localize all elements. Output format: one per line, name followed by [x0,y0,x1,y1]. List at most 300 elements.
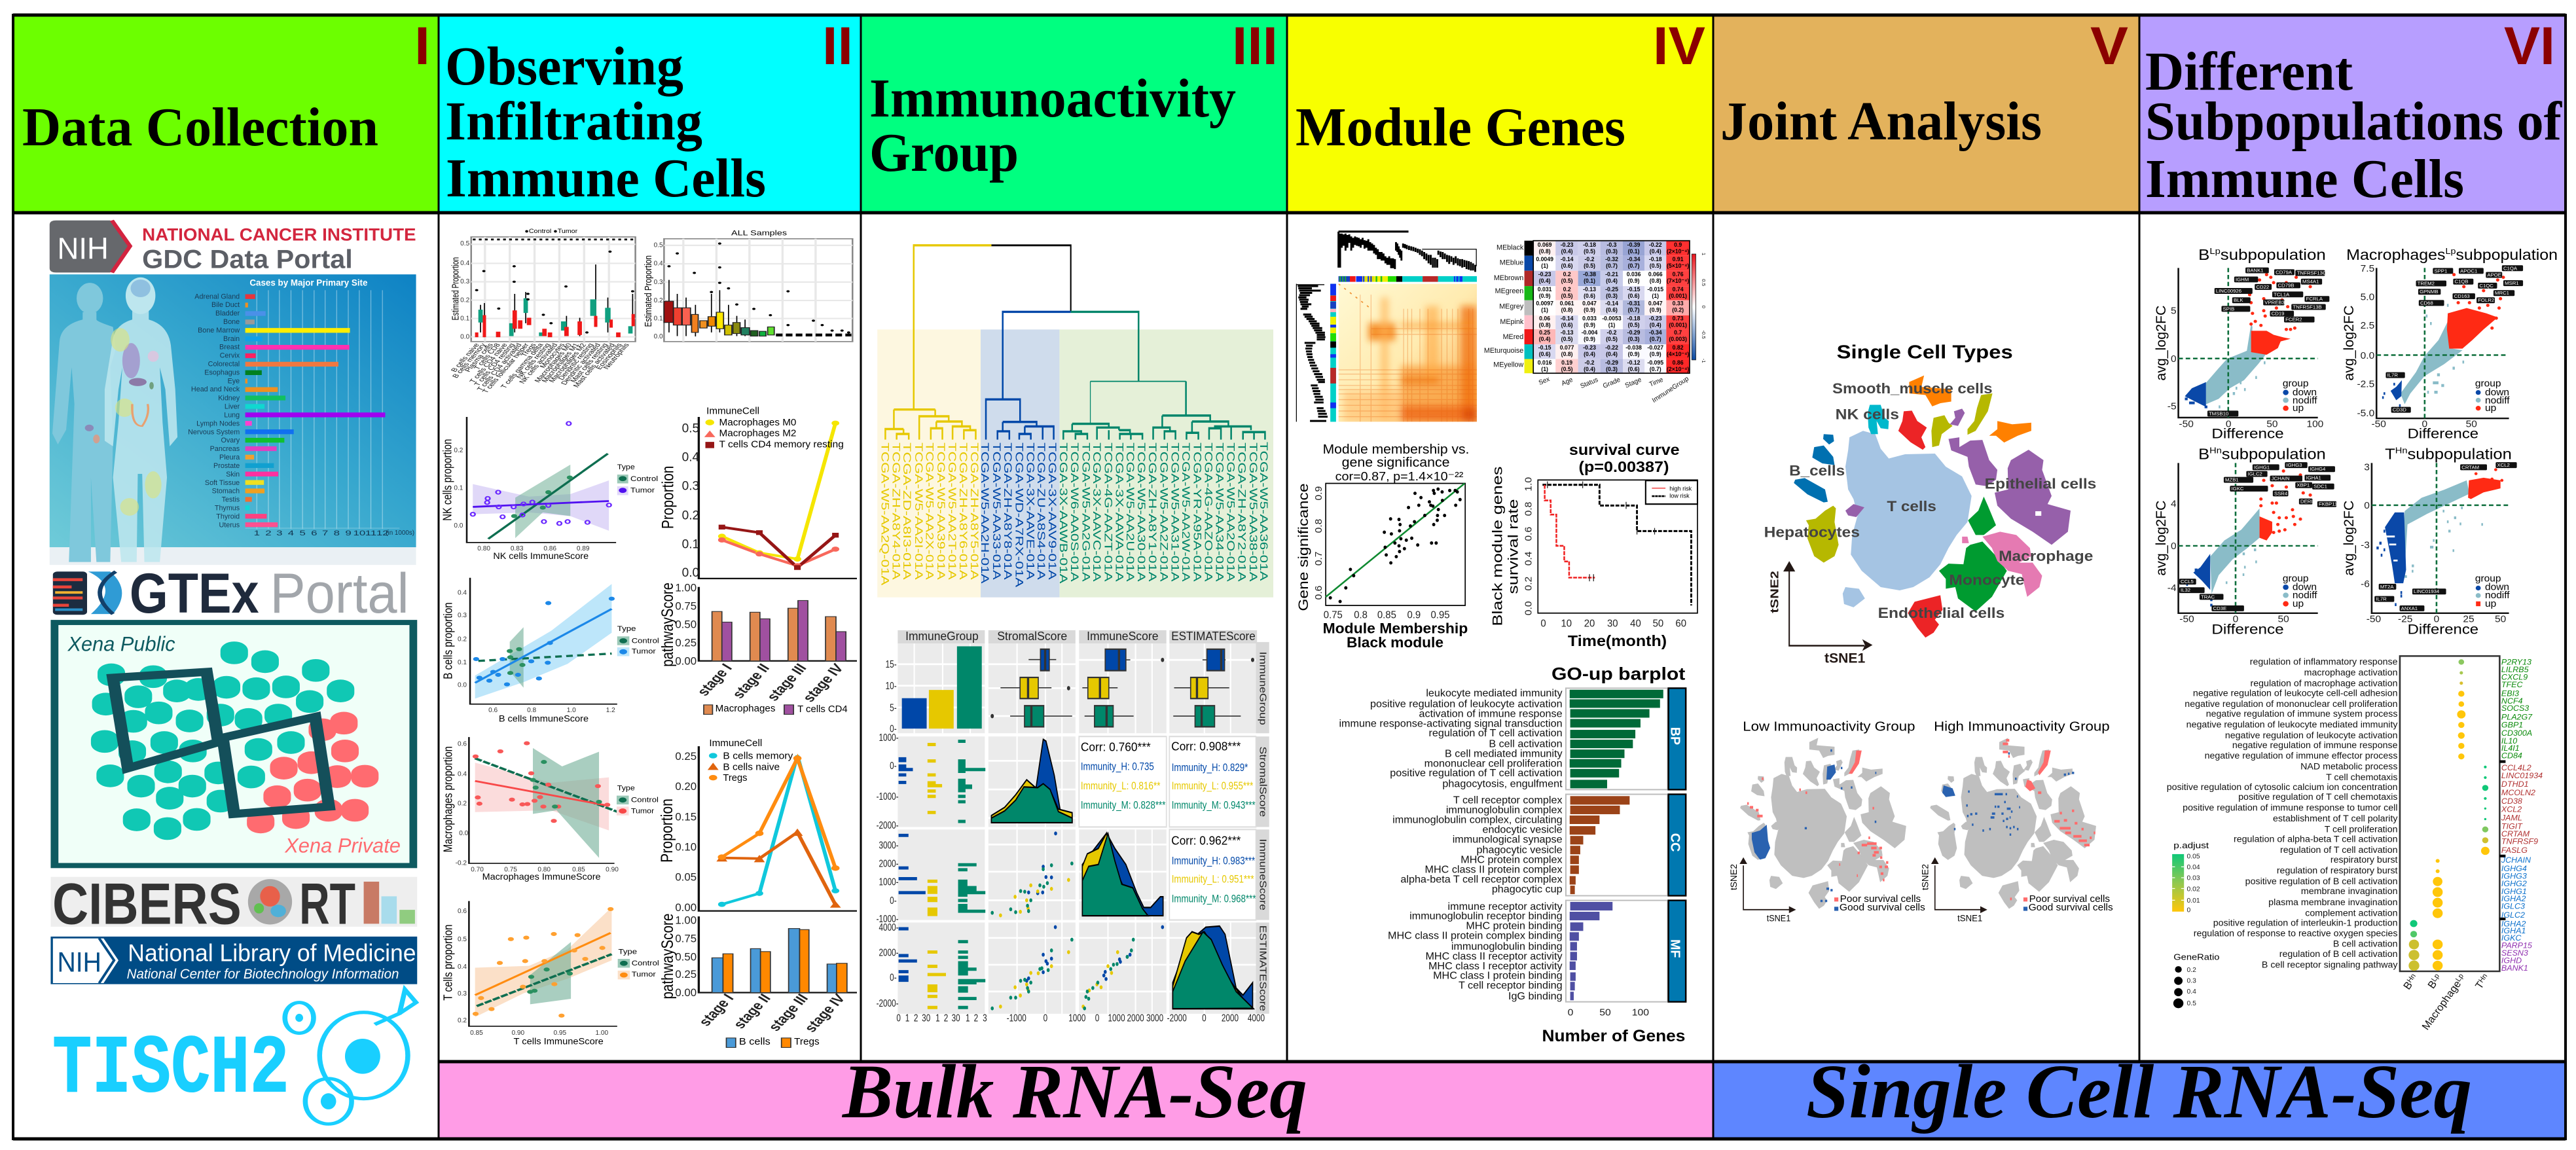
chart: B Hn subpopulation volcano: Hn [2209,446,2222,456]
chart: Cases by Major Primary Site: 2 [265,530,272,537]
chart: GO enrichment dot plot: membrane invagination [2301,886,2398,896]
chart: score correlation matrix: StromalScore [1258,747,1268,817]
chart: boxplot control vs tumor: T cells follicular helper [481,342,531,394]
chart: single cell types tSNE: Single Cell Types [1837,341,2013,363]
chart: GO-up barplot: 50 [1599,1007,1611,1018]
chart: T cells scatter: 0.2 [458,1017,467,1024]
chart: B Lp subpopulation volcano: BLK [2234,297,2243,303]
chart: GO enrichment dot plot: negative regulation of leukocyte activation [2225,730,2398,740]
chart: module-trait correlation heatmap: (0.4) [1584,351,1595,357]
chart: Macrophages Lp subpopulation volcano: C1QB [2454,279,2469,285]
chart: B Hn subpopulation volcano: group [2283,573,2308,584]
chart: Cases by Major Primary Site: Pleura [219,454,240,461]
chart: Macrophages Lp subpopulation volcano: nodiff [2485,395,2510,406]
chart: score correlation matrix: 2000- [879,858,899,869]
chart: pathway score B cells and Tregs: 0.00 [675,986,697,999]
chart: NK cells scatter [441,417,658,561]
chart: sample dendrogram: TCGA-W5-AA2H-01A [979,442,990,584]
chart: module-trait correlation heatmap: -0.18 [1649,256,1662,262]
chart: B cells scatter [442,578,659,724]
chart: GO enrichment dot plot: MCOLN2 [2501,788,2535,797]
chart: module-trait correlation heatmap: (7×10⁻⁴) [1667,278,1689,284]
chart: GO-up barplot: positive regulation of leukocyte activation [1370,699,1563,710]
chart: GO-up barplot: T cell receptor complex [1453,795,1563,806]
chart: T Hn subpopulation volcano: Difference [2408,621,2478,637]
chart: module-trait correlation heatmap: (0.5) [1628,321,1640,329]
chart: module-trait correlation heatmap: (0.5) [1650,262,1661,269]
chart: B cells scatter: B cells ImmuneScore [499,713,589,724]
chart: Cases by Major Primary Site: Bone Marrow [198,327,240,334]
chart: boxplot control vs tumor: NK cells activated [518,342,560,385]
chart: module-trait correlation heatmap: -0.29 [1605,359,1618,366]
chart: module-trait correlation heatmap: 0.033 [1582,315,1597,322]
chart: Macrophages Lp subpopulation volcano: APOC1 [2460,268,2477,274]
chart: boxplot all samples: Estimated Proportion [642,255,654,327]
logo: NIH GDC Data Portal [50,221,416,274]
chart: Cases by Major Primary Site: Brain [223,335,240,343]
chart: Macrophages Lp subpopulation volcano: Macrophages [2346,247,2442,263]
chart: module-trait correlation heatmap: 0.25 [1539,329,1550,336]
chart: B Hn subpopulation volcano: -4 [2168,583,2177,594]
chart: Cases by Major Primary Site: 7 [322,530,328,537]
chart: sample dendrogram: TCGA-W5-AA38-01A [1247,442,1259,582]
chart: score correlation matrix: 1000- [879,732,899,743]
chart: Macrophages Lp subpopulation volcano: 7.5 [2361,263,2374,274]
chart: module-trait correlation heatmap: -0.23 [1561,242,1574,248]
chart: score correlation matrix: Corr: 0.962*** [1171,833,1241,848]
chart: Macrophages Lp subpopulation volcano: subpopulation [2456,247,2558,263]
chart: Cases by Major Primary Site: Thyroid [216,512,240,520]
chart: single cell types tSNE [1764,341,2096,666]
chart: module-trait correlation heatmap: 0.2 [1563,271,1571,278]
chart: boxplot all samples: 0.5 [654,242,663,249]
chart: B Hn subpopulation volcano: IGLC2 [2247,471,2262,477]
chart: sample dendrogram: TCGA-W5-AA34-01A [1213,442,1225,582]
chart: GO enrichment dot plot: 0.01 [2187,897,2200,905]
chart: survival curve: Time(month) [1568,632,1667,649]
chart: T cells scatter: T cells proportion [442,924,455,1001]
chart: B cells scatter: Tumor [632,647,656,656]
chart: Cases by Major Primary Site: (in 1000s) [386,529,414,536]
chart: macrophage/T cell proportion by stage: Macrophages M0 [719,417,796,427]
chart: module membership scatter: Gene significance [1296,484,1311,611]
chart: GO enrichment dot plot: 0.02 [2187,886,2200,893]
chart: module-trait correlation heatmap: -0.31 [1627,300,1640,307]
chart: sample dendrogram: TCGA-W5-AA2I-01A [913,442,924,580]
logo: Xena Public / Private [54,622,413,865]
chart: T Hn subpopulation volcano [2341,446,2517,637]
chart: Macrophages Lp subpopulation volcano: SPP1 [2434,268,2447,274]
chart: survival curve: 1.0 [1523,477,1534,492]
chart: sample dendrogram: TCGA-W5-AA2Z-01A [1157,442,1170,582]
logo: Xena Public / Private: Xena Private [284,835,401,857]
chart: pathway score macrophages and T cells CD4: 1.00 [675,582,697,594]
chart: score correlation matrix: 0- [890,972,897,983]
chart: Cases by Major Primary Site: Testis [222,495,240,504]
chart: T Hn subpopulation volcano: 50 [2495,614,2506,624]
chart: module-trait correlation heatmap: -0.3 [1607,242,1617,248]
chart: score correlation matrix: Immunity_M: 0.943*** [1172,800,1256,812]
chart: sample dendrogram: TCGA-W5-AA31-01A [1169,442,1181,582]
chart: boxplot control vs tumor: Eosinophils [594,342,624,370]
chart: module-trait correlation heatmap: -0.23 [1538,271,1551,278]
chart: NK cells scatter: 0.83 [511,545,524,552]
chart: module-trait correlation heatmap: 0.9 [1674,242,1682,248]
chart: module-trait correlation heatmap: Status [1580,376,1599,390]
chart: GO-up barplot: immunoglobulin complex [1446,805,1563,816]
chart: module-trait correlation heatmap: (2×10⁻⁴) [1667,366,1689,372]
chart: GO-up barplot: immunoglobulin receptor binding [1409,911,1563,922]
chart: pathway score B cells and Tregs: stage III [763,992,812,1033]
chart: B Lp subpopulation volcano: Difference [2211,425,2284,441]
chart: module-trait correlation heatmap: (0.5) [1561,366,1573,372]
logo: CIBERSORT: RT [299,871,355,937]
chart: module-trait correlation heatmap: -0.21 [1605,271,1618,278]
chart: GO enrichment dot plot: IGLC2 [2501,910,2525,920]
chart: module-trait correlation heatmap: (0.001) [1669,293,1687,299]
chart: module-trait correlation heatmap: (0.4) [1539,278,1551,284]
chart: module membership scatter [1296,442,1469,651]
chart: GO enrichment dot plot: T [2473,979,2486,992]
chart: Cases by Major Primary Site: 3 [276,530,283,537]
chart: T cells scatter: Control [632,960,659,967]
chart: GO-up barplot: MHC class II protein complex binding [1388,931,1563,941]
chart: pathway score macrophages and T cells CD4 [658,582,857,714]
chart: module-trait correlation heatmap: MEgreen [1495,287,1523,295]
chart: module-trait correlation heatmap: 0.069 [1538,242,1552,248]
chart: sample dendrogram: TCGA-W5-AA39-01A [935,442,947,580]
chart: module-trait correlation heatmap: -1 [1701,359,1707,363]
chart: B Lp subpopulation volcano: LINC00926 [2216,288,2241,294]
chart: Macrophages Lp subpopulation volcano: -50 [2371,419,2386,429]
chart: single cell types tSNE: tSNE2 [1769,571,1781,613]
panel IV: module genes [1296,232,1707,1045]
chart: survival curve [1489,441,1697,649]
chart: sample dendrogram: TCGA-ZH-A8Y6-01A [957,442,969,580]
chart: T Hn subpopulation volcano: down [2485,582,2509,593]
chart: B cell and Treg proportion by stage: Proportion [658,799,676,863]
header II: Observing Infiltrating Immune Cells [439,15,861,212]
chart: GO-up barplot: phagocytic vesicle [1477,845,1563,856]
chart: boxplot control vs tumor: Neutrophils [602,342,631,370]
chart: GO enrichment dot plot: 0.3 [2187,978,2196,984]
chart: module-trait correlation heatmap: MEyellow [1493,361,1523,369]
chart: score correlation matrix: 30 [952,1013,960,1024]
chart: score correlation matrix: 4000- [879,922,899,933]
chart: B Lp subpopulation volcano: -50 [2179,419,2194,429]
chart: sample dendrogram [877,245,1273,598]
chart: GO enrichment dot plot: CRTAM [2501,829,2530,838]
chart: score correlation matrix: 0- [890,760,897,771]
chart: GO enrichment dot plot: CD38 [2501,797,2522,806]
chart: GO-up barplot: phagocytosis, engulfment [1442,779,1563,789]
header II: Observing Infiltrating Immune Cells: II [822,16,853,76]
chart: Cases by Major Primary Site: Colorectal [208,360,240,368]
chart: B Lp subpopulation volcano: 100 [2306,419,2323,429]
chart: module-trait correlation heatmap: (0.9) [1628,351,1640,357]
chart: sample dendrogram: TCGA-W5-AA2T-01A [946,442,958,580]
chart: score correlation matrix: 0 [1043,1013,1048,1024]
chart: survival curve: 0.4 [1523,551,1534,566]
chart: T Hn subpopulation volcano: -50 [2367,614,2381,624]
chart: score correlation matrix: Immunity_L: 0.951*** [1172,874,1254,886]
chart: module-trait correlation heatmap: (0.2) [1672,306,1684,314]
chart: pathway score B cells and Tregs [658,914,857,1047]
chart: B Hn subpopulation volcano: subpopulation [2222,446,2326,463]
chart: T Hn subpopulation volcano: LINC01934 [2414,588,2439,594]
chart: B Hn subpopulation volcano: FKBP11 [2319,501,2337,507]
logo: National Library of Medicine: National Library of Medicine [128,939,416,966]
chart: B Lp subpopulation volcano: Lp [2209,246,2221,256]
chart: sample dendrogram: TCGA-W5-AA2X-01A [924,442,935,580]
chart: pathway score macrophages and T cells CD4: T cells CD4 [797,704,848,714]
chart: Macrophages Lp subpopulation volcano: 0 [2422,419,2427,429]
header VI: Different Subpopulations of Immune Cells: Immune Cells [2145,149,2464,209]
chart: score correlation matrix: 2000 [1127,1013,1144,1024]
logo: TISCH2: TISCH2 [52,1023,289,1117]
chart: module membership scatter: cor=0.87, p=1.4×10⁻²² [1335,470,1463,483]
chart: pathway score macrophages and T cells CD4: stage I [693,662,736,698]
chart: module membership scatter: 0.8 [1313,519,1324,533]
chart: NK cells scatter: 0.89 [577,545,590,552]
logo: NIH GDC Data Portal: NIH [58,232,109,266]
panel V: joint analysis [1730,341,2113,924]
chart: boxplot control vs tumor: T cells CD8 [473,342,502,371]
chart: score correlation matrix: 0 [896,1013,901,1024]
chart: Macrophages scatter: -0.2 [456,859,467,867]
chart: GO enrichment dot plot: negative regulation of immune response [2232,740,2398,750]
chart: module membership scatter: 0.6 [1313,586,1324,600]
chart: module-trait correlation heatmap: -0.18 [1583,242,1596,248]
chart: T Hn subpopulation volcano: -25 [2398,614,2412,624]
chart: T Hn subpopulation volcano: 3 [2364,462,2370,473]
chart: GO-up barplot: MHC protein complex [1460,855,1563,866]
chart: pathway score macrophages and T cells CD4: stage II [727,662,774,700]
chart: module membership scatter: 0.85 [1377,609,1396,621]
chart: GO enrichment dot plot: CXCL9 [2501,673,2528,681]
chart: B Hn subpopulation volcano: IGHA1 [2306,475,2321,480]
chart: module membership scatter: 0.75 [1324,609,1343,621]
chart: Macrophages Lp subpopulation volcano: 2.5 [2361,320,2374,331]
chart: score correlation matrix: 5- [890,702,897,713]
chart: score correlation matrix: ImmuneScore [1258,839,1268,910]
chart: B Hn subpopulation volcano: IL32 [2181,587,2190,593]
chart: B cell and Treg proportion by stage: 0.15 [675,811,697,823]
chart: GO-up barplot [1339,664,1686,1045]
chart: module-trait correlation heatmap: Sex [1538,376,1551,387]
chart: GO enrichment dot plot: IGKC [2501,933,2522,943]
chart: score correlation matrix: Immunity_M: 0.968*** [1172,893,1256,905]
chart: NK cells scatter: 0.86 [543,545,556,552]
chart: score correlation matrix: Immunity_M: 0.828*** [1081,800,1166,812]
chart: Cases by Major Primary Site: Cervix [220,351,240,360]
chart: score correlation matrix: -1000- [877,913,899,924]
chart: Cases by Major Primary Site: 1 [254,530,260,537]
chart: pathway score macrophages and T cells CD4: 0.25 [675,636,697,649]
footer band: Bulk RNA-Seq [439,1049,1713,1138]
chart: score correlation matrix: 3000- [879,840,899,851]
chart: module-trait correlation heatmap: (0.5) [1561,336,1573,342]
chart: GO enrichment dot plot: macrophage activation [2304,667,2398,677]
chart: module-trait correlation heatmap: 0.33 [1673,300,1684,307]
chart: Cases by Major Primary Site: Nervous System [188,428,240,436]
chart: GO enrichment dot plot: Macrophage [2420,979,2463,1032]
chart: low immunoactivity group tSNE: Good survival cells [1840,903,1925,913]
chart: pathway score B cells and Tregs: stage II [729,992,775,1031]
chart: score correlation matrix: Immunity_H: 0.829* [1172,763,1248,774]
chart: module-trait correlation heatmap: (0.003) [1669,336,1687,342]
chart: boxplot control vs tumor: Dendritic resting [556,342,596,381]
chart: module-trait correlation heatmap: (1) [1652,293,1659,299]
chart: Cases by Major Primary Site: Lung [224,411,240,420]
chart: GO enrichment dot plot: TIGIT [2501,822,2523,831]
chart: NK cells scatter: 0.2 [454,447,463,454]
chart: module-trait correlation heatmap: -0.12 [1627,359,1640,366]
chart: module membership scatter: 0.9 [1313,486,1324,501]
chart: single cell types tSNE: Smooth_muscle cells [1832,382,1993,397]
chart: NK cells scatter: Type [617,463,635,471]
chart: sample dendrogram: TCGA-W5-AA2O-01A [1225,442,1237,582]
chart: module-trait correlation heatmap: -0.14 [1605,300,1618,307]
chart: B Hn subpopulation volcano: CCL5 [2181,579,2194,584]
chart: B Lp subpopulation volcano: nodiff [2293,395,2317,406]
chart: module-trait correlation heatmap: (0.6) [1561,262,1573,269]
chart: GO enrichment dot plot: EBI3 [2501,689,2519,698]
chart: GO enrichment dot plot: NCF4 [2501,696,2523,706]
chart: sample dendrogram: TCGA-ZH-A8Y1-01A [1146,442,1158,582]
chart: module-trait correlation heatmap: (2×10⁻⁴) [1667,248,1689,255]
chart: Macrophages Lp subpopulation volcano: Difference [2408,425,2478,441]
chart: Macrophages Lp subpopulation volcano: down [2485,387,2509,398]
chart: module-trait correlation heatmap: 0.0097 [1536,300,1553,307]
header IV: Module Genes: IV [1653,16,1705,76]
chart: module-trait correlation heatmap: 0.031 [1538,286,1552,293]
chart: score correlation matrix: Immunity_L: 0.955*** [1172,781,1254,793]
chart: Cases by Major Primary Site: 10 [353,530,365,537]
chart: B Lp subpopulation volcano: avg_log2FC [2154,306,2169,381]
chart: Macrophages Lp subpopulation volcano: 50 [2466,419,2477,429]
chart: GO-up barplot: MHC class I protein binding [1433,971,1563,981]
chart: boxplot control vs tumor: 0.3 [460,278,470,285]
chart: T Hn subpopulation volcano: -6 [2361,579,2370,590]
chart: module-trait correlation heatmap: (0.5) [1584,262,1595,269]
chart: module-trait correlation heatmap: Time [1648,376,1665,389]
chart: module-trait correlation heatmap: (0.8) [1561,351,1573,357]
chart: high immunoactivity group tSNE: Good survival cells [2029,903,2113,913]
chart: macrophage/T cell proportion by stage: 0.1 [682,537,699,551]
chart: single cell types tSNE: Hepatocytes [1764,525,1860,541]
chart: B Hn subpopulation volcano: IGHG4 [2310,466,2325,472]
chart: pathway score B cells and Tregs: stage IV [799,992,850,1034]
chart: pathway score macrophages and T cells CD4: pathwayScore [658,583,677,667]
chart: pathway score B cells and Tregs: 1.00 [675,914,697,926]
chart: Cases by Major Primary Site: Prostate [213,462,240,470]
chart: macrophage/T cell proportion by stage [659,405,857,580]
chart: T Hn subpopulation volcano: 0 [2364,500,2370,511]
chart: module-trait correlation heatmap: -0.13 [1583,286,1596,293]
chart: B cells scatter: B cells proportion [442,602,455,679]
chart: module-trait correlation heatmap: (0.5) [1561,293,1573,299]
chart: sample dendrogram: TCGA-W5-AA2G-01A [1079,442,1092,582]
chart: GO enrichment dot plot: IGLC3 [2501,902,2525,911]
chart: module-trait correlation heatmap: (0.3) [1606,366,1618,372]
chart: B Lp subpopulation volcano [2154,246,2329,441]
chart: GO enrichment dot plot: IGHA1 [2501,926,2526,935]
chart: GO enrichment dot plot: Hn [2477,973,2489,984]
chart: module-trait correlation heatmap: -0.015 [1647,286,1663,293]
chart: module membership scatter: 0.95 [1431,609,1450,621]
chart: survival curve: survival rate [1505,499,1521,594]
chart: B cells scatter: 1.0 [567,707,576,714]
chart: sample dendrogram: TCGA-ZH-A8Y5-01A [968,442,980,580]
chart: module-trait correlation heatmap: (0.4) [1561,248,1573,255]
chart: Macrophages scatter: 0.90 [606,866,619,873]
chart: GO enrichment dot plot: 0.03 [2187,875,2200,882]
chart: GO enrichment dot plot: IGHG1 [2501,887,2527,896]
header IV: Module Genes: Module Genes [1296,97,1625,158]
chart: B Hn subpopulation volcano: B [2198,446,2209,463]
chart: GO enrichment dot plot: Lp [2430,973,2441,983]
chart: module-trait correlation heatmap: 0.7 [1674,329,1682,336]
chart: sample dendrogram: TCGA-W5-AA2W-01A [1180,442,1191,582]
chart: module-trait correlation heatmap: (0.9) [1539,293,1551,299]
chart: score correlation matrix: -1000- [877,791,899,802]
chart: B cell and Treg proportion by stage: 0.25 [675,750,697,763]
chart: T Hn subpopulation volcano: subpopulation [2407,446,2512,463]
chart: module-trait correlation heatmap: (1) [1541,262,1548,269]
chart: boxplot control vs tumor: Macrophages M0 [533,342,574,384]
chart: module-trait correlation heatmap: MEturquoise [1484,347,1523,355]
chart: module membership scatter: 0.8 [1354,609,1368,621]
chart: module-trait correlation heatmap: -0.027 [1647,344,1663,351]
chart: GO enrichment dot plot: IGHA2 [2501,894,2526,903]
chart: sample dendrogram: TCGA-4G-AAZO-01A [1202,442,1214,582]
chart: GO-up barplot: BP [1667,727,1682,745]
chart: NK cells scatter: 0.1 [454,485,463,492]
chart: B Hn subpopulation volcano: DERL3 [2300,499,2317,505]
chart: B Hn subpopulation volcano: IGHG3 [2286,462,2302,468]
chart: sample dendrogram: TCGA-ZH-A8Y8-01A [1002,442,1013,580]
chart: survival curve: 20 [1584,618,1595,630]
chart: B Lp subpopulation volcano: -5 [2168,401,2177,412]
chart: module-trait correlation heatmap: (0.9) [1584,336,1595,342]
chart: GO enrichment dot plot: B [2425,979,2439,991]
chart: module-trait correlation heatmap: Age [1561,376,1574,387]
chart: GO enrichment dot plot: regulation of inflammatory response [2250,656,2398,667]
chart: GO enrichment dot plot: complement activation [2305,908,2398,918]
chart: score correlation matrix: ImmuneGroup [905,629,979,643]
chart: T Hn subpopulation volcano: ANXA1 [2401,605,2418,611]
chart: single cell types tSNE: T cells [1887,499,1936,515]
chart: Cases by Major Primary Site: Liver [225,403,240,411]
chart: score correlation matrix: 2 [914,1013,918,1024]
chart: single cell types tSNE: Endothelial cells [1878,606,2005,622]
chart: single cell types tSNE: B_cells [1789,463,1845,479]
chart: sample dendrogram: TCGA-W6-AA0S-01A [1068,442,1080,582]
chart: GO-up barplot: activation of immune response [1419,709,1563,719]
chart: module-trait correlation heatmap: (4×10⁻⁴) [1667,351,1689,357]
chart: GO enrichment dot plot: 0.5 [2187,1000,2196,1007]
chart: Cases by Major Primary Site: Breast [219,344,240,351]
chart: module-trait correlation heatmap: -0.39 [1627,242,1640,248]
chart: GO enrichment dot plot: XCL2 [2501,804,2522,814]
chart: module-trait correlation heatmap: MEblack [1497,243,1524,252]
chart: module-trait correlation heatmap: (0.9) [1650,351,1661,357]
chart: module-trait correlation heatmap: (0.3) [1606,293,1618,299]
chart: T cells scatter: T cells ImmuneScore [514,1036,604,1046]
chart: macrophage/T cell proportion by stage: 0.3 [682,480,699,494]
chart: boxplot all samples: 0.3 [654,279,663,286]
